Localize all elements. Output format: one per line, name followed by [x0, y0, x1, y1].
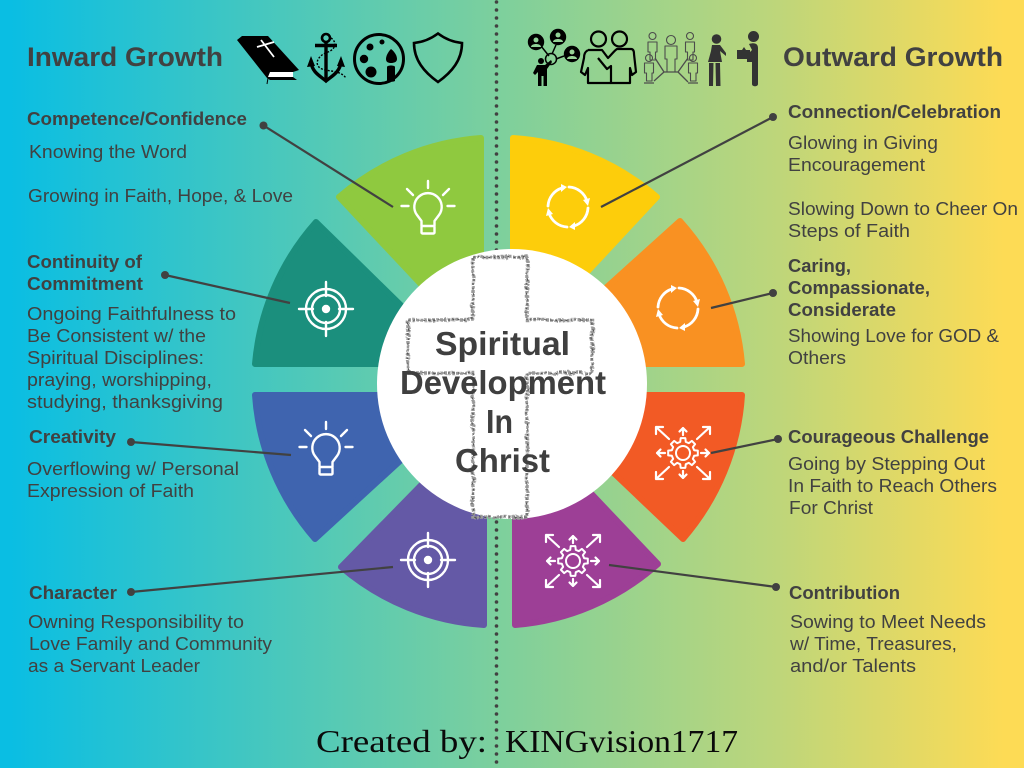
segment: yellow Connection [513, 138, 657, 300]
icon: cycle arrows [656, 285, 700, 331]
icon: shield [414, 34, 462, 82]
text block: Creativity: Expression of Faith [27, 481, 194, 501]
text block: Character [28, 583, 272, 676]
connector: Competence [260, 122, 393, 207]
text block: Continuity of Commitment [27, 252, 236, 412]
text block: Creativity: Creativity [29, 427, 116, 447]
ornate cross outline [408, 257, 592, 517]
text block: Contribution: w/ Time, Treasures, [789, 634, 957, 654]
text block: Character: as a Servant Leader [28, 656, 200, 676]
text block: Continuity of Commitment: Spiritual Disciplines: [27, 348, 204, 368]
text block: Caring, Compassionate, Considerate: Others [788, 348, 846, 368]
text block: Courageous Challenge: In Faith to Reach Others [788, 476, 997, 496]
icon: bible [237, 36, 299, 84]
center title: Christ [455, 442, 550, 479]
icon: target [401, 533, 455, 587]
footer credit: Created by: [316, 723, 487, 759]
icon: artist palette [354, 34, 404, 84]
icon: gear with arrows [656, 427, 710, 479]
center title: Spiritual [435, 325, 570, 362]
text block: Competence/Confidence: Competence/Confidence [27, 109, 247, 129]
text block: Caring, Compassionate, Considerate: Compassionate, [788, 278, 930, 298]
center dotted divider [495, 2, 498, 768]
icon: cycle arrows [546, 184, 590, 230]
connector: Continuity [161, 271, 290, 303]
connector: Character [127, 567, 393, 596]
center white circle [377, 249, 647, 519]
text block: Courageous Challenge: Going by Stepping Out [788, 454, 985, 474]
segment: purple Contribution [515, 487, 658, 625]
text block: Character: Owning Responsibility to [28, 612, 244, 632]
icon: people network [528, 29, 580, 86]
segment: teal Continuity [255, 222, 414, 364]
icon: two friends embracing [581, 32, 636, 83]
icon: gear with arrows [546, 535, 600, 587]
segment: orange Caring [598, 221, 742, 364]
text block: Courageous Challenge: Courageous Challenge [788, 427, 989, 447]
text block: Competence/Confidence: Knowing the Word [29, 142, 187, 162]
text block: Caring, Compassionate, Considerate: Caring, [788, 256, 851, 276]
connector: Connection [601, 113, 777, 207]
connector: Creativity [127, 438, 291, 455]
text block: Competence/Confidence: Growing in Faith, Hope, & Love [28, 186, 293, 206]
heading: Inward Growth: Inward Growth [27, 42, 223, 72]
text block: Character: Love Family and Community [29, 634, 272, 654]
icon: person giving a gift to another person [708, 31, 759, 86]
text block: Connection/Celebration [788, 102, 1018, 241]
text block: Continuity of Commitment: Be Consistent w/ the [27, 326, 206, 346]
icon: lightbulb [300, 422, 352, 474]
text block: Continuity of Commitment: Continuity of [27, 252, 143, 272]
segment: violet Character [341, 475, 484, 625]
text block: Connection/Celebration: Connection/Celebration [788, 102, 1001, 122]
icon: target [299, 282, 353, 336]
text block: Connection/Celebration: Glowing in Giving [788, 133, 938, 153]
segment: blue Creativity [255, 395, 411, 539]
text block: Contribution [789, 583, 986, 676]
text block: Competence/Confidence [27, 109, 293, 206]
connector: Courageous [711, 435, 782, 453]
text block: Continuity of Commitment: Commitment [27, 274, 143, 294]
center title: In [486, 403, 513, 440]
footer credit [316, 723, 738, 759]
icon: anchor [307, 34, 346, 83]
text block: Character: Character [29, 583, 117, 603]
icon: connected group of people [644, 32, 698, 83]
heading: Outward Growth: Outward Growth [783, 42, 1003, 72]
text block: Courageous Challenge [788, 427, 997, 518]
text block: Continuity of Commitment: praying, worshipping, [27, 370, 212, 390]
footer credit: KINGvision1717 [505, 723, 738, 759]
text block: Contribution: Sowing to Meet Needs [790, 612, 986, 632]
text block: Caring, Compassionate, Considerate: Showing Love for GOD & [788, 326, 999, 346]
text block: Creativity: Overflowing w/ Personal [27, 459, 239, 479]
segment: green Competence [339, 138, 481, 300]
text block: Courageous Challenge: For Christ [789, 498, 873, 518]
text block: Connection/Celebration: Slowing Down to Cheer On [788, 199, 1018, 219]
text block: Caring, Compassionate, Considerate [788, 256, 999, 368]
text block: Creativity [27, 427, 239, 501]
segment: red Courageous [601, 395, 742, 539]
text block: Contribution: and/or Talents [790, 656, 916, 676]
connector: Caring [711, 289, 777, 308]
connector: Contribution [609, 565, 780, 591]
text block: Caring, Compassionate, Considerate: Considerate [788, 300, 896, 320]
text block: Continuity of Commitment: Ongoing Faithfulness to [27, 304, 236, 324]
center title [400, 325, 606, 479]
text block: Connection/Celebration: Steps of Faith [788, 221, 910, 241]
text block: Connection/Celebration: Encouragement [788, 155, 925, 175]
icon: lightbulb [402, 181, 454, 234]
text block: Continuity of Commitment: studying, thanksgiving [27, 392, 223, 412]
center title: Development [400, 364, 606, 401]
text block: Contribution: Contribution [789, 583, 900, 603]
